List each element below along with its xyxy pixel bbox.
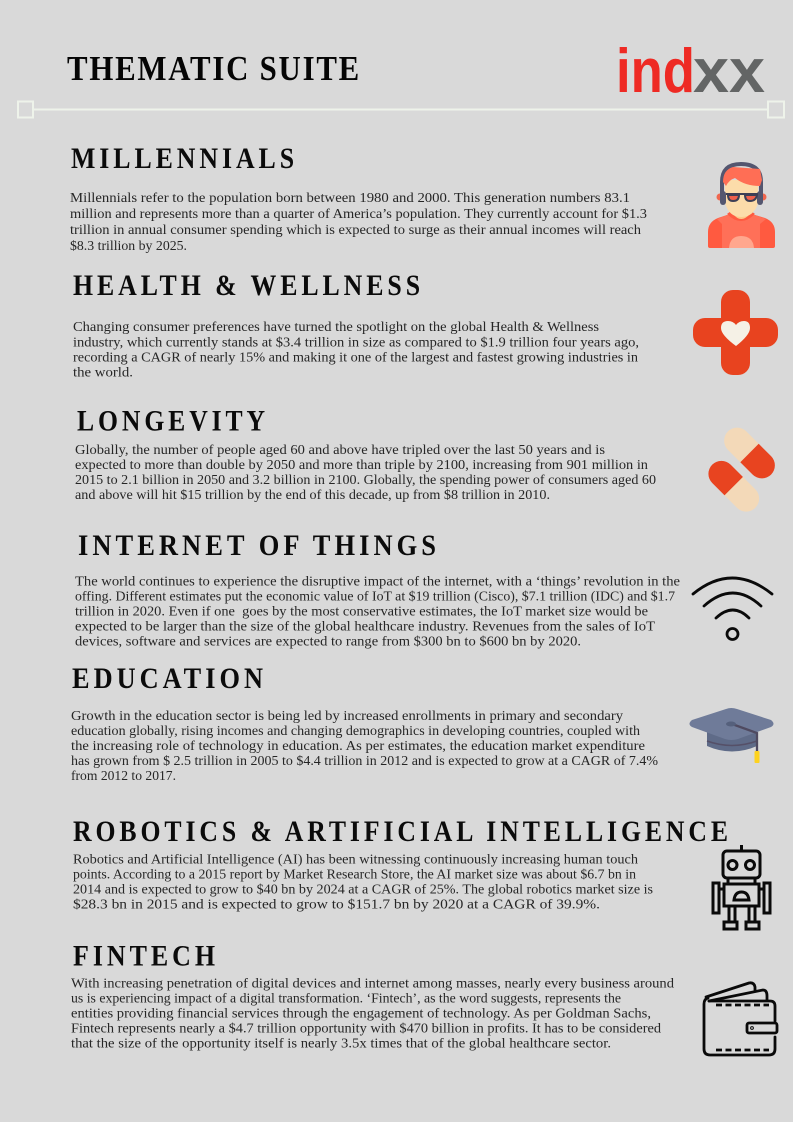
- text: longevity: expected to more than double by 2050 and more than triple by 2100, increasing from 901 million in: [75, 458, 648, 473]
- text: millennials: Millennials refer to the population born between 1980 and 2000. This generation numbers 83.1: [70, 191, 630, 206]
- text: robotics & ai: 2014 and is expected to grow to $40 bn by 2024 at a CAGR of 25%. The global robotics market size is: [73, 882, 653, 898]
- logo: indxx: [616, 37, 766, 106]
- text: longevity: 2015 to 2.1 billion in 2050 and 3.2 billion in 2100. Globally, the spending power of consumers aged 60: [75, 473, 656, 488]
- text: internet of things: devices, software and services are expected to range from $300 bn to $600 bn by 2020.: [75, 634, 581, 650]
- text: robotics & ai: points. According to a 2015 report by Market Research Store, the AI market size was about $6.7 bn in: [73, 868, 636, 882]
- text: education: Growth in the education sector is being led by increased enrollments in primary and secondary: [71, 709, 623, 724]
- text: health & wellness: recording a CAGR of nearly 15% and making it one of the largest and fastest growing industries in: [73, 350, 638, 366]
- text: internet of things: [75, 574, 680, 650]
- heading: millennials: MILLENNIALS: [71, 143, 298, 175]
- heading: fintech: FINTECH: [73, 940, 219, 972]
- text: health & wellness: [73, 320, 639, 380]
- text: health & wellness: industry, which currently stands at $3.4 trillion in size as compared to $1.9 trillion four years ago,: [73, 336, 639, 350]
- icon: wallet: [704, 983, 777, 1055]
- icon: pills: [703, 422, 780, 517]
- panel: education: [71, 663, 774, 784]
- icon: person with headphones: [708, 164, 775, 248]
- text: internet of things: offing. Different estimates put the economic value of IoT at $19 trillion (Cisco), $7.1 trillion (IDC) and $1.7: [75, 590, 675, 604]
- heading: internet of things: INTERNET OF THINGS: [78, 530, 440, 562]
- text: longevity: [75, 443, 656, 503]
- title: THEMATIC SUITE: [67, 49, 361, 88]
- panel: fintech: [71, 940, 777, 1055]
- text: millennials: $8.3 trillion by 2025.: [70, 239, 187, 254]
- logo: indxx: xx: [693, 37, 766, 106]
- text: health & wellness: the world.: [73, 366, 133, 380]
- panel: millennials: [70, 143, 775, 254]
- heading: education: EDUCATION: [72, 663, 267, 695]
- text: fintech: us is experiencing impact of a digital transformation. ‘Fintech’, as the word suggests, represents the: [71, 992, 621, 1006]
- text: robotics & ai: [73, 852, 653, 912]
- text: education: the increasing role of technology in education. As per estimates, the education market expenditure: [71, 739, 645, 754]
- text: robotics & ai: $28.3 bn in 2015 and is expected to grow to $151.7 bn by 2020 at a CAGR of 39.9%.: [73, 898, 600, 912]
- text: robotics & ai: Robotics and Artificial Intelligence (AI) has been witnessing continuously increasing human touch: [73, 852, 638, 868]
- text: fintech: Fintech represents nearly a $4.7 trillion opportunity with $470 billion in profits. It has to be considered: [71, 1022, 661, 1036]
- text: longevity: and above will hit $15 trillion by the end of this decade, up from $8 trillion in 2010.: [75, 488, 550, 503]
- logo: indxx: ind: [616, 37, 695, 106]
- text: millennials: trillion in annual consumer spending which is expected to surge as their annual incomes will reach: [70, 223, 641, 238]
- text: internet of things: expected to be larger than the size of the global healthcare industry. Revenues from the sales of IoT: [75, 620, 655, 634]
- text: longevity: Globally, the number of people aged 60 and above have tripled over the last 50 years and is: [75, 443, 605, 458]
- text: health & wellness: Changing consumer preferences have turned the spotlight on the global Health & Wellness: [73, 320, 599, 335]
- text: internet of things: trillion in 2020. Even if one goes by the most conservative estimates, the IoT market size would be: [75, 604, 648, 620]
- text: fintech: that the size of the opportunity itself is nearly 3.5x times that of the global healthcare sector.: [71, 1036, 611, 1052]
- icon: wifi: [693, 578, 772, 640]
- text: fintech: With increasing penetration of digital devices and internet among masses, nearly every business around: [71, 976, 674, 992]
- icon: robot: [713, 845, 770, 929]
- text: internet of things: The world continues to experience the disruptive impact of the internet, with a ‘things’ revolution in the: [75, 574, 680, 590]
- text: education: has grown from $ 2.5 trillion in 2005 to $4.4 trillion in 2012 and is expected to grow at a CAGR of 7.4%: [71, 754, 658, 769]
- header rule: [18, 102, 784, 118]
- icon: graduation cap: [690, 708, 774, 763]
- panel: health & wellness: [73, 270, 778, 380]
- icon: medical cross with heart: [693, 290, 778, 375]
- text: education: from 2012 to 2017.: [71, 769, 176, 784]
- panel: internet of things: [75, 530, 772, 650]
- text: millennials: million and represents more than a quarter of America’s population. They currently account for $1.3: [70, 207, 647, 222]
- text: education: education globally, rising incomes and changing demographics in developing countries, coupled with: [71, 724, 640, 739]
- text: education: [71, 709, 658, 784]
- heading: health & wellness: HEALTH & WELLNESS: [73, 270, 424, 302]
- heading: longevity: LONGEVITY: [77, 406, 269, 438]
- panel: longevity: [75, 406, 780, 517]
- panel: robotics & ai: [73, 816, 770, 929]
- text: fintech: [71, 976, 674, 1052]
- text: millennials: [70, 191, 647, 254]
- text: fintech: entities providing financial services through the engagement of technology. As per Goldman Sachs,: [71, 1006, 651, 1022]
